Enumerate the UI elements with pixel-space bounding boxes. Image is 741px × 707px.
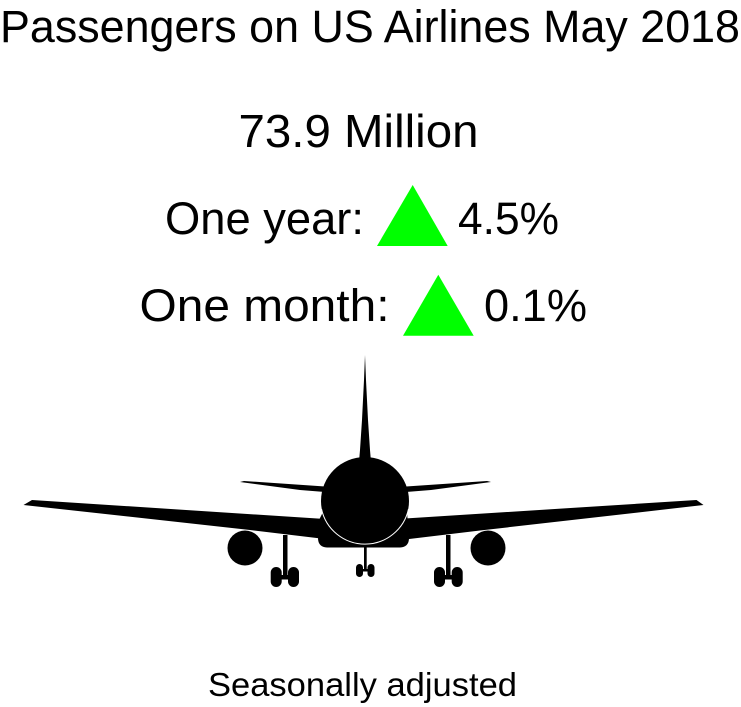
horizontal stabilizers [240, 481, 325, 492]
nose landing gear [356, 547, 374, 577]
total passengers figure: 73.9 Million [238, 105, 478, 157]
engines [228, 530, 262, 566]
one month value: 0.1% [484, 280, 587, 331]
wings [24, 500, 325, 539]
tail fin [359, 355, 371, 462]
icon: green up triangle, one year [377, 185, 448, 246]
fuselage [321, 457, 409, 545]
right main landing gear [434, 535, 463, 587]
left main landing gear [271, 535, 299, 587]
footnote: Seasonally adjusted [208, 666, 517, 703]
one year label: One year: [165, 193, 364, 244]
one month change row [140, 275, 587, 336]
icon: green up triangle, one month [403, 275, 474, 336]
one year value: 4.5% [458, 193, 559, 244]
icon: airplane front view [24, 355, 704, 587]
belly fairing [318, 512, 409, 548]
title: Passengers on US Airlines May 2018 [0, 1, 740, 52]
one month label: One month: [140, 280, 390, 331]
one year change row [165, 185, 559, 246]
fuselage highlight arc [322, 509, 408, 544]
